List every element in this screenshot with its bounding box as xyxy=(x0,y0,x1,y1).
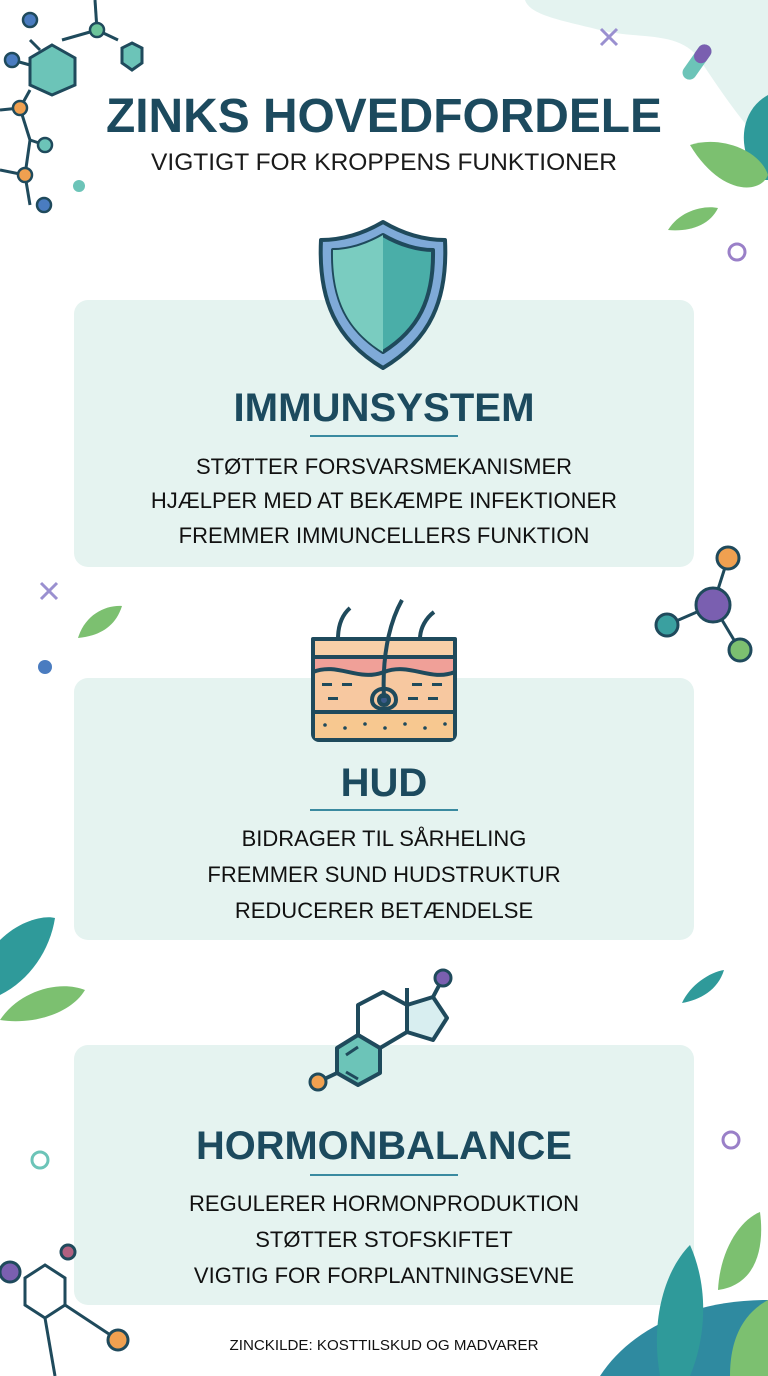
panel: hud: HUD xyxy=(341,761,427,805)
panel: immunsystem: IMMUNSYSTEM xyxy=(234,386,534,430)
panel: hud: BIDRAGER TIL SÅRHELING xyxy=(242,826,526,851)
background blob top right xyxy=(525,0,768,150)
subtitle: VIGTIGT FOR KROPPENS FUNKTIONER xyxy=(151,149,617,176)
decorations bottom xyxy=(0,1132,768,1376)
panel: hud: REDUCERER BETÆNDELSE xyxy=(235,898,533,923)
panel: hormonbalance xyxy=(74,970,694,1305)
panel: immunsystem: HJÆLPER MED AT BEKÆMPE INFEKTIONER xyxy=(151,488,617,513)
footer: ZINCKILDE: KOSTTILSKUD OG MADVARER xyxy=(230,1338,538,1354)
panel: hormonbalance: STØTTER STOFSKIFTET xyxy=(255,1227,513,1252)
icon: shield xyxy=(321,222,445,368)
panel: immunsystem: FREMMER IMMUNCELLERS FUNKTION xyxy=(179,523,589,548)
title: ZINKS HOVEDFORDELE xyxy=(106,90,662,143)
panel: immunsystem: STØTTER FORSVARSMEKANISMER xyxy=(196,454,572,479)
panel: hud: FREMMER SUND HUDSTRUKTUR xyxy=(207,862,561,887)
icon: skin xyxy=(313,600,455,740)
icon: molecule top left xyxy=(0,0,142,205)
panel: immunsystem xyxy=(74,222,694,567)
panel: hormonbalance: VIGTIG FOR FORPLANTNINGSEVNE xyxy=(194,1263,574,1288)
decorations top right xyxy=(601,29,768,260)
leaves left and right mid-low xyxy=(0,917,724,1021)
panel: hormonbalance: REGULERER HORMONPRODUKTION xyxy=(189,1191,579,1216)
panel: hud xyxy=(74,600,694,940)
panel: hormonbalance: HORMONBALANCE xyxy=(196,1124,572,1168)
decorations mid xyxy=(38,547,751,674)
icon: hormone molecule xyxy=(310,970,451,1090)
